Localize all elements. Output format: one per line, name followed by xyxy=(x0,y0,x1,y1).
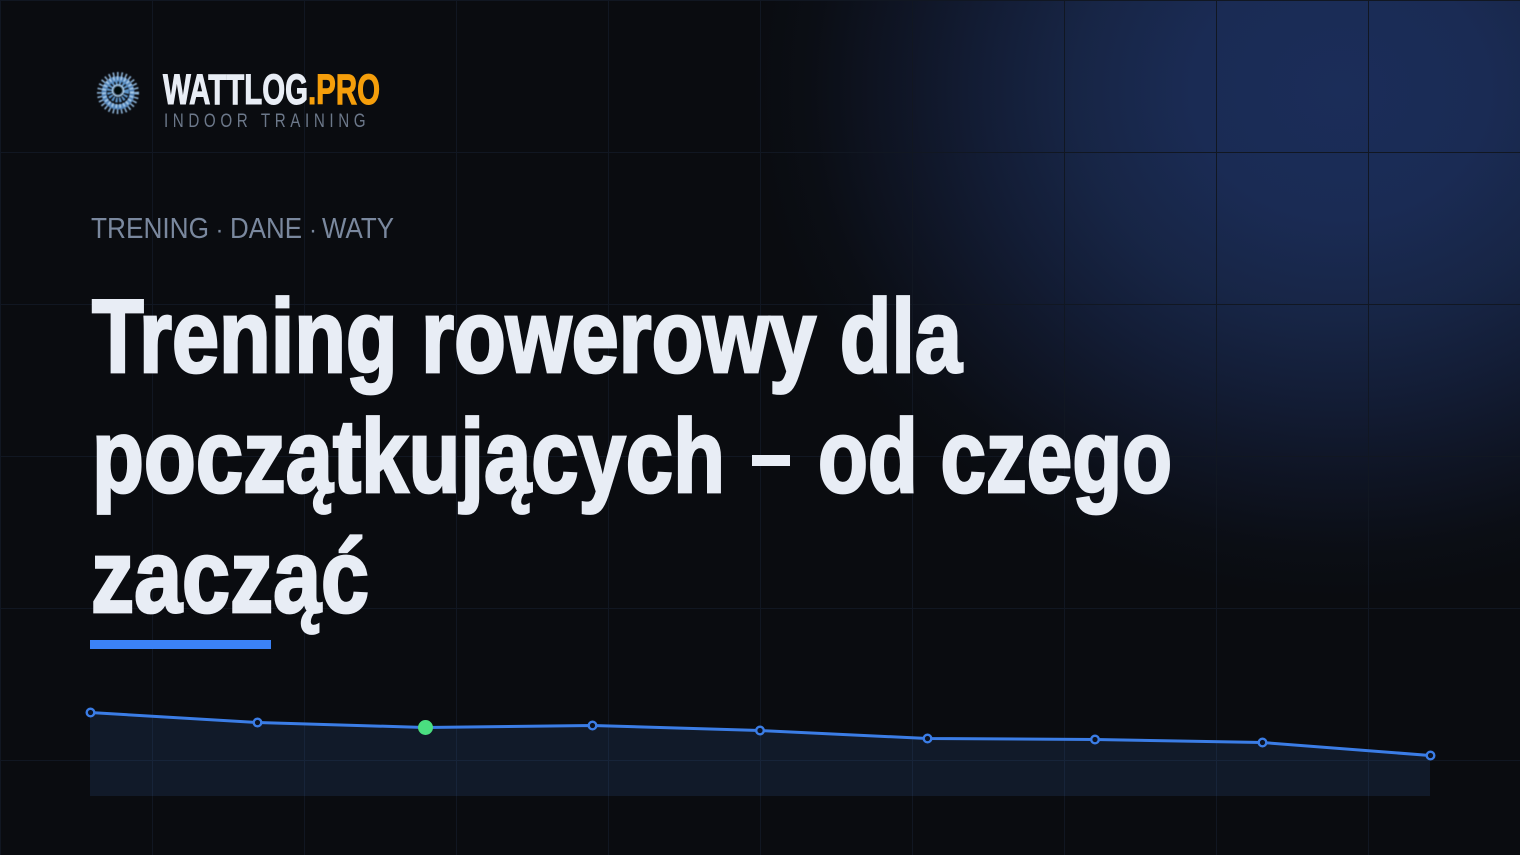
icon: bicycle cassette xyxy=(100,74,136,112)
brand name: WATTLOG.PRO xyxy=(163,66,380,114)
title underline xyxy=(90,640,271,649)
eyebrow xyxy=(91,213,394,245)
chart markers xyxy=(87,709,1434,759)
eyebrow: WATY xyxy=(322,213,394,245)
eyebrow: · xyxy=(216,217,224,244)
title: zacząć xyxy=(91,519,369,635)
chart line xyxy=(90,712,1430,756)
line chart xyxy=(87,709,1434,796)
highlighted marker xyxy=(418,720,433,735)
logo xyxy=(100,66,380,131)
title: początkujących xyxy=(92,399,725,515)
title: od czego xyxy=(818,399,1172,515)
eyebrow: DANE xyxy=(230,213,302,245)
title: Trening rowerowy dla xyxy=(92,279,963,395)
eyebrow: TRENING xyxy=(91,213,209,245)
title xyxy=(91,279,1172,635)
chart area fill xyxy=(90,712,1430,796)
tagline: INDOOR TRAINING xyxy=(164,109,366,131)
eyebrow: · xyxy=(309,217,317,244)
